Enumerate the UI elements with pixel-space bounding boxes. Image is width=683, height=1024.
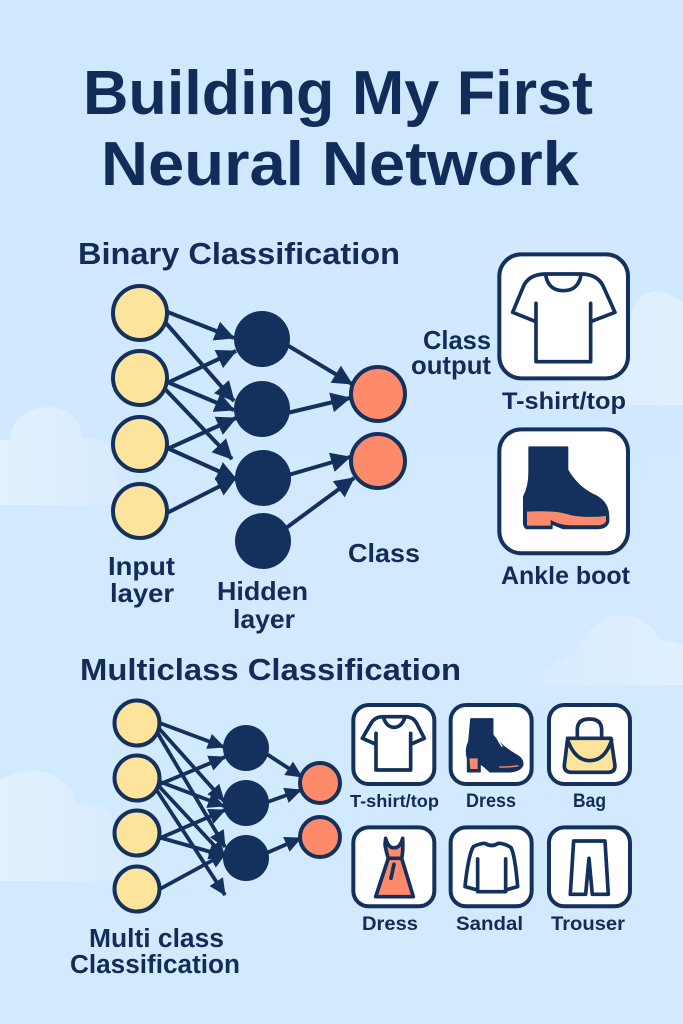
label: input layer: Input [108, 551, 175, 581]
title: Building My First [83, 59, 593, 128]
label: dress (boot tile): Dress [466, 791, 516, 812]
panel: multiclass classification [70, 652, 630, 979]
label: t-shirt/top small: T-shirt/top [350, 791, 439, 811]
label: multi class classification: Classification [70, 951, 240, 979]
background clouds [0, 291, 683, 881]
label: class: Class [348, 538, 420, 568]
icon tile: ankle boot [499, 429, 628, 553]
icon tile: small t-shirt [353, 705, 434, 784]
icon tile: sandal (sweater) [451, 827, 532, 906]
icon tile: dress [353, 827, 434, 906]
label: ankle boot: Ankle boot [501, 562, 631, 590]
title [83, 59, 593, 199]
label: multi class classification: Multi class [89, 925, 224, 953]
label: bag: Bag [573, 791, 606, 812]
label: class output [411, 325, 491, 380]
heading: binary classification: Binary Classification [78, 236, 400, 271]
output nodes: multiclass [300, 763, 340, 857]
label: input layer [108, 551, 175, 608]
label: hidden layer [217, 576, 308, 634]
output nodes [351, 367, 405, 488]
arrows: input to hidden to output [165, 311, 354, 531]
network diagram: binary [113, 286, 405, 569]
title: Neural Network [101, 130, 580, 199]
icon tile: small boot [451, 705, 532, 784]
heading: multiclass classification: Multiclass Classification [80, 652, 461, 687]
panel: binary classification [78, 236, 631, 634]
icon tile: t-shirt [499, 254, 628, 378]
label: class output: Class [423, 325, 491, 355]
label: class output: output [411, 350, 491, 380]
icon tile: bag [549, 705, 630, 784]
label: hidden layer: Hidden [217, 576, 308, 606]
label: trouser: Trouser [551, 913, 625, 935]
label: multi class classification [70, 925, 240, 979]
arrows: multiclass connections [154, 722, 302, 895]
hidden layer nodes [234, 311, 291, 569]
label: input layer: layer [110, 578, 174, 608]
hidden nodes: multiclass [223, 725, 269, 881]
label: hidden layer: layer [233, 604, 295, 634]
label: sandal: Sandal [456, 913, 523, 935]
network diagram: multiclass [114, 700, 340, 912]
icon tile: trouser [549, 827, 630, 906]
input layer nodes [113, 286, 167, 538]
label: t-shirt/top: T-shirt/top [502, 388, 626, 415]
label: dress: Dress [362, 913, 418, 935]
input nodes: multiclass [114, 700, 160, 912]
